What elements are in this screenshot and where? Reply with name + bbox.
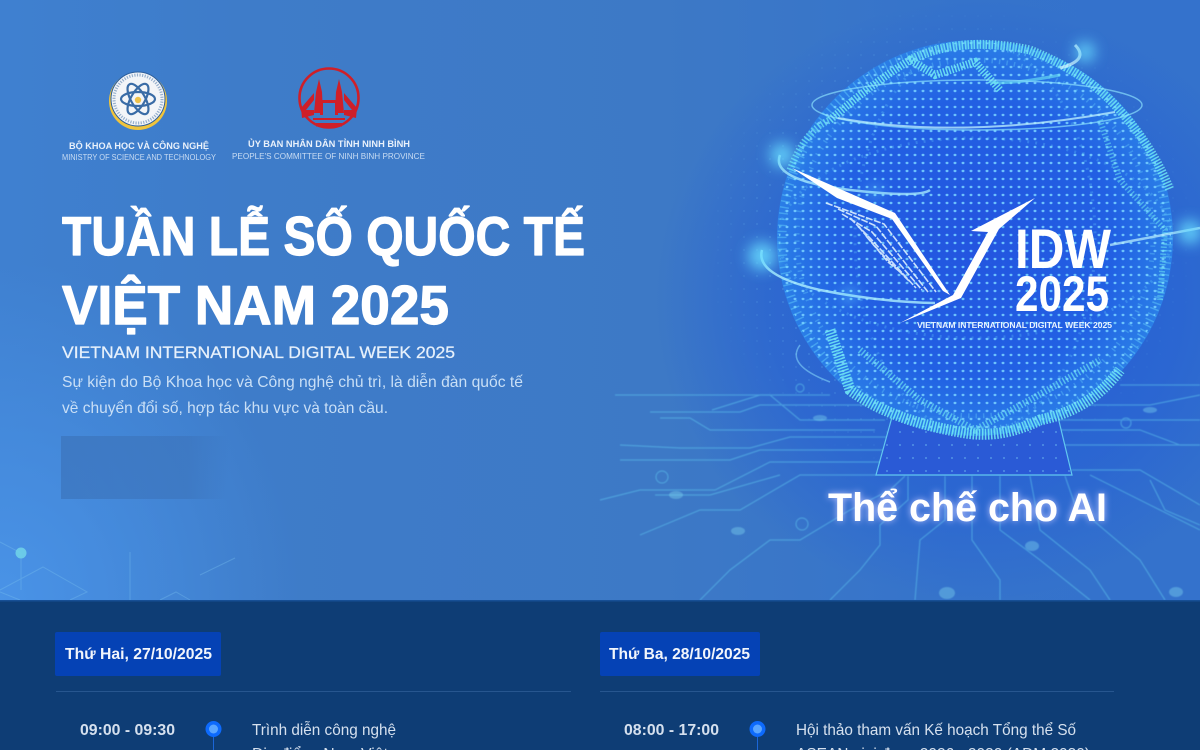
slogan: Thể chế cho AI [828,486,1107,530]
logo right wing [900,198,1035,323]
date badge: Tuesday [600,632,760,676]
committee name: ỦY BAN NHÂN DÂN TỈNH NINH BÌNH [248,138,410,150]
logo: Ninh Binh People's Committee [232,68,425,161]
timeline marker: Monday [206,721,222,750]
session: ASEAN digital masterplan workshop: Hội thảo tham vấn Kế hoạch Tổng thể Số [796,721,1076,739]
circuit node glows [669,407,1183,599]
schedule column: Tuesday [600,632,1114,750]
emblem: red seal [300,68,358,128]
logo: Ninh Binh People's Committee: PEOPLE'S COMMITTEE OF NINH BINH PROVINCE [232,152,425,161]
date badge: Monday: Thứ Hai, 27/10/2025 [65,646,212,663]
description [62,372,523,417]
title: VIỆT NAM 2025 [62,274,449,336]
decorative circuit bottom left [0,542,235,600]
logo wordmark: IDW [1015,217,1111,280]
description: Sự kiện do Bộ Khoa học và Công nghệ chủ trì, là diễn đàn quốc tế [62,372,523,391]
decorative circuit node [16,548,26,558]
session: technology showcase [252,720,396,750]
time: Tuesday session: 08:00 - 17:00 [624,722,719,739]
title [62,205,585,336]
timeline marker: Tuesday [750,721,766,750]
session: technology showcase: Trình diễn công nghệ [252,720,396,739]
title: TUẦN LỄ SỐ QUỐC TẾ [62,205,585,267]
orbit glows [748,42,1200,301]
chip under globe [876,417,1072,475]
date badge: Tuesday: Thứ Ba, 28/10/2025 [609,646,750,663]
continents [790,44,1170,434]
description: về chuyển đổi số, hợp tác khu vực và toàn cầu. [62,399,388,417]
IDW 2025 logo [792,168,1112,330]
IDW 2025 logo: 2025 [1015,266,1109,322]
IDW 2025 logo: VIETNAM INTERNATIONAL DIGITAL WEEK 2025 [917,320,1112,330]
schedule column: Monday [55,632,571,750]
session: ASEAN digital masterplan workshop [796,721,1090,750]
slogan: Thể chế cho AI [828,486,1107,530]
logo left wing [792,168,950,295]
emblem: atom seal [109,72,167,130]
orbit rings [761,45,1200,382]
schedule panel [0,600,1200,750]
wing circuit traces [826,203,936,292]
empty placeholder box [61,436,229,499]
logo: Ministry of Science and Technology: MINISTRY OF SCIENCE AND TECHNOLOGY [62,153,217,162]
circuit board lines [600,384,1200,600]
subtitle: VIETNAM INTERNATIONAL DIGITAL WEEK 2025 [62,343,455,362]
logo: Ministry of Science and Technology [62,72,217,162]
ministry name: BỘ KHOA HỌC VÀ CÔNG NGHỆ [69,140,209,152]
date badge: Monday [55,632,221,676]
globe [748,40,1200,436]
hero background [0,0,1200,600]
globe rim [779,42,1171,434]
time: Monday session: 09:00 - 09:30 [80,722,175,739]
